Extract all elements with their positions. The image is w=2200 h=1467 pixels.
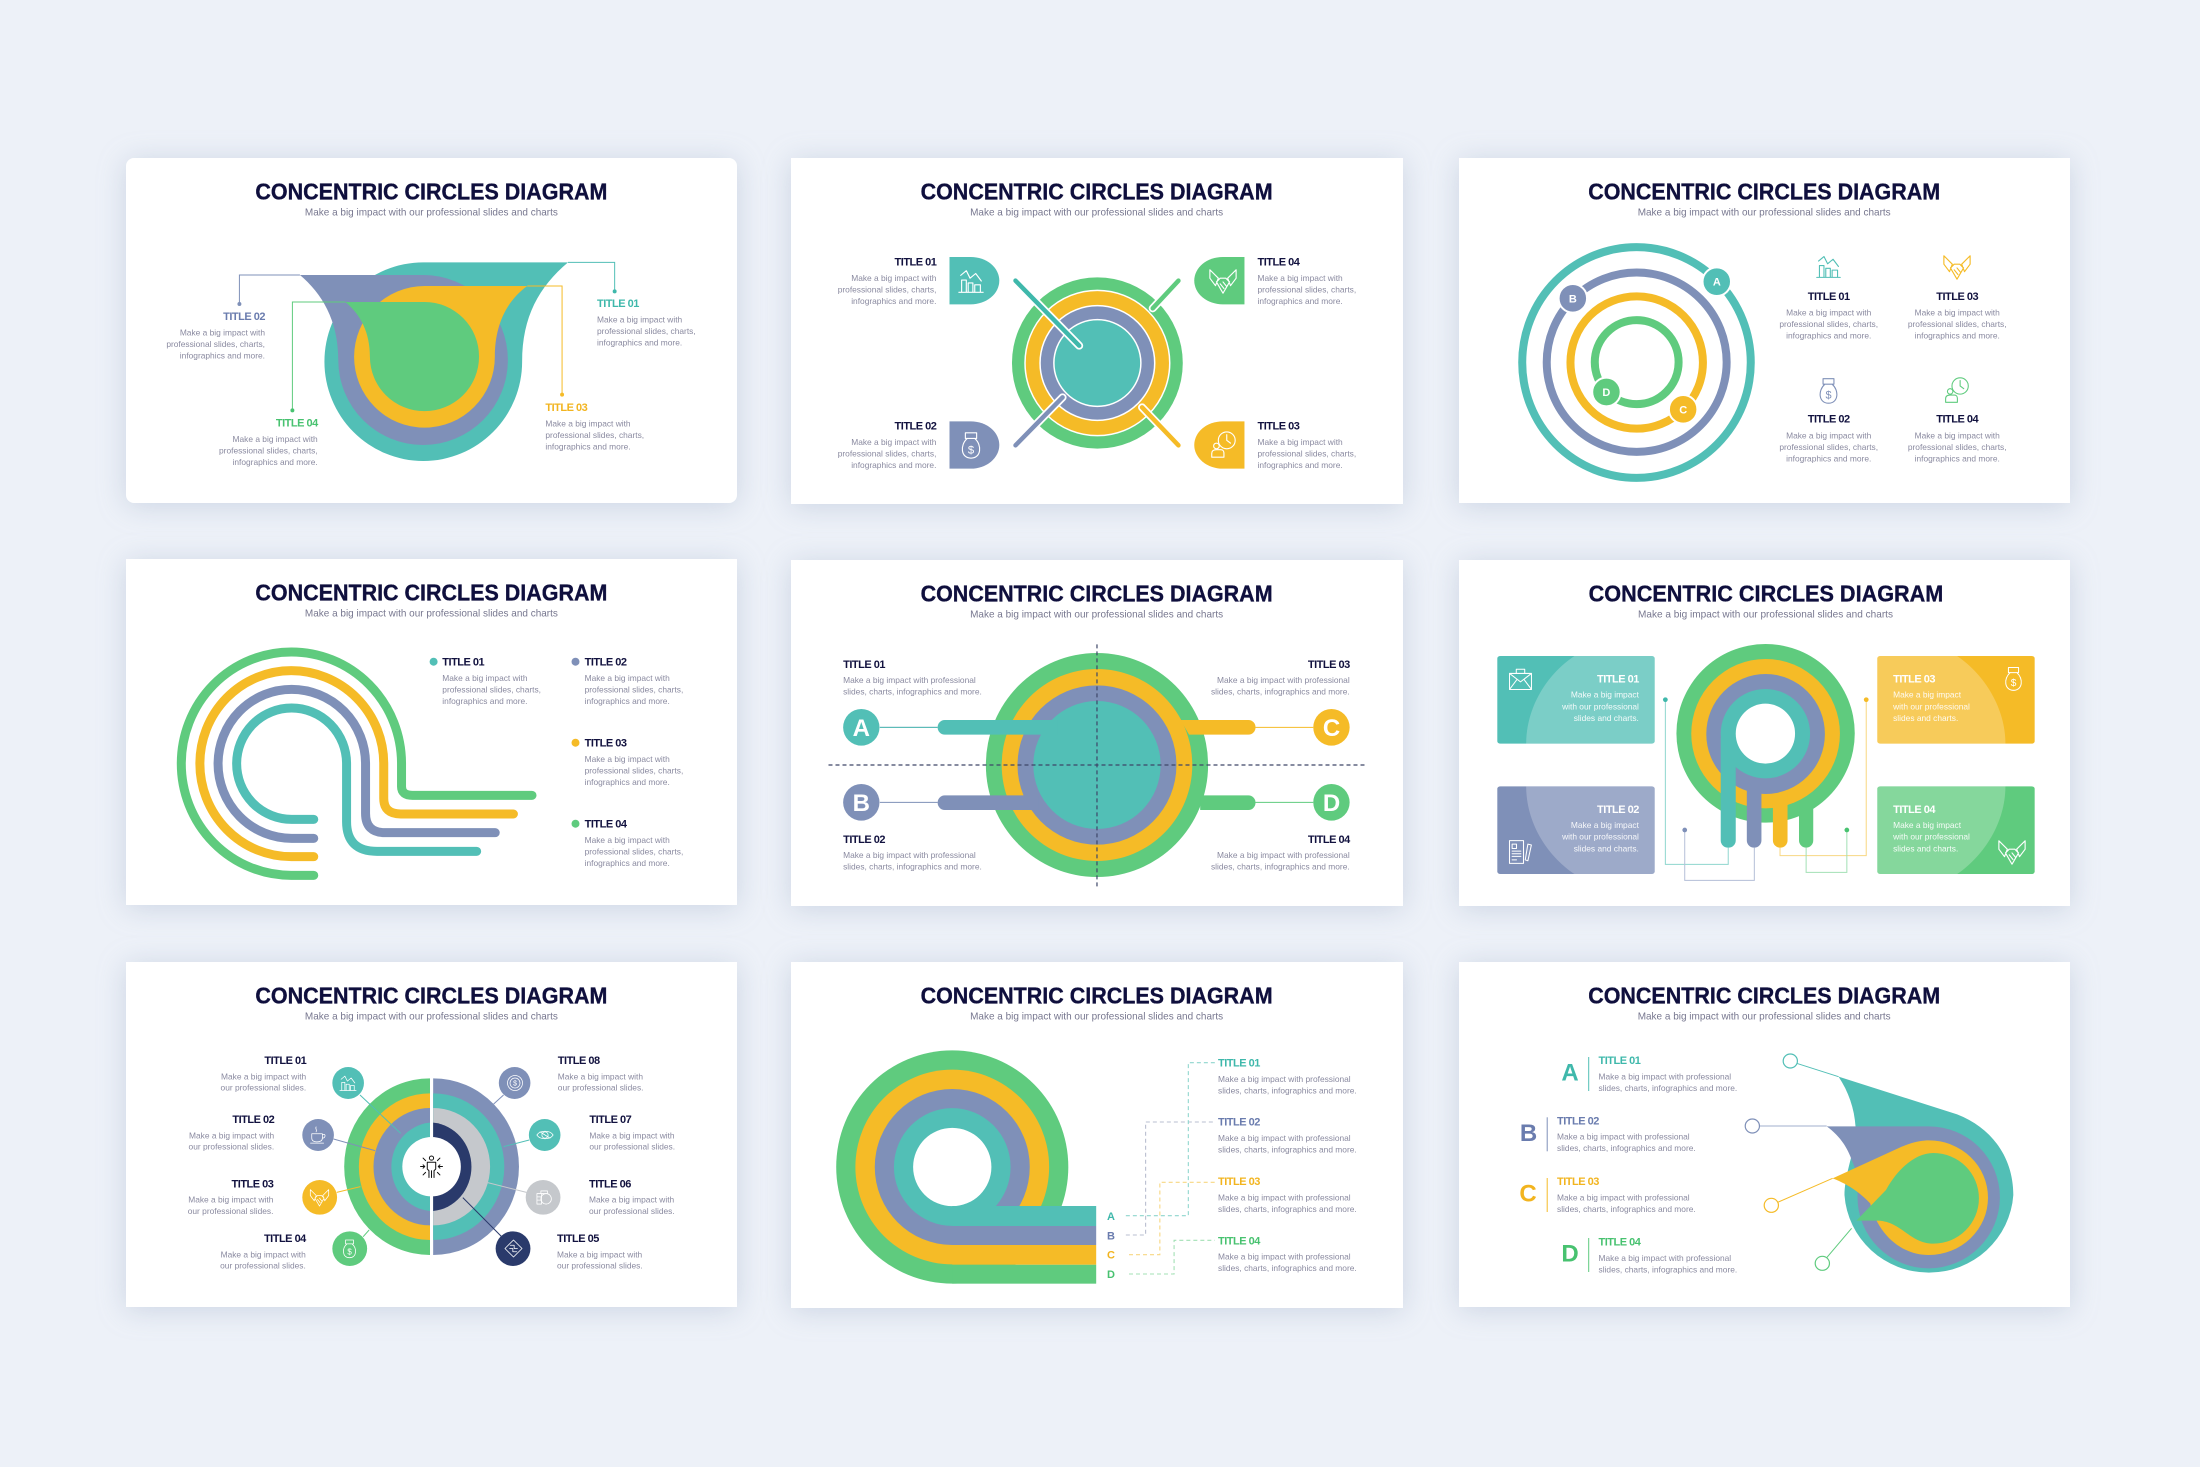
card text: title 03: with our professional	[1892, 701, 1970, 711]
subtitle: Make a big impact with our professional slides and charts	[305, 207, 558, 219]
text: title 03: our professional slides.	[188, 1206, 273, 1216]
legend: title 04: Make a big impact with	[585, 835, 670, 845]
list item C: C	[1519, 1180, 1537, 1207]
text: title 04: infographics and more.	[1258, 296, 1343, 306]
text: title 05: TITLE 05	[557, 1233, 599, 1245]
text: title 01: Make a big impact with	[221, 1071, 307, 1081]
list item D	[1561, 1237, 1737, 1274]
text: title 02: our professional slides.	[189, 1142, 274, 1152]
panel: quadrant circles	[791, 560, 1403, 906]
text: title 07: our professional slides.	[589, 1142, 675, 1152]
text: title 04: slides, charts, infographics and more.	[1218, 1263, 1357, 1273]
legend: title 04: TITLE 04	[585, 819, 628, 831]
panel: looping tracks	[126, 559, 737, 905]
text: title 01: slides, charts, infographics and more.	[1218, 1086, 1357, 1096]
text: title 03	[1258, 421, 1356, 470]
diagram: orbit rings	[1522, 247, 1751, 478]
text: title 02: TITLE 02	[1808, 414, 1850, 426]
text: title 02: professional slides, charts,	[166, 339, 265, 349]
card text: title 03: Make a big impact	[1893, 690, 1962, 700]
card text: title 04	[1892, 804, 1970, 853]
heading: CONCENTRIC CIRCLES DIAGRAM	[1588, 982, 1940, 1008]
text: title 03: Make a big impact with professional	[1217, 675, 1350, 685]
badge letters: C	[1679, 404, 1687, 416]
legend: title 04: infographics and more.	[585, 858, 670, 868]
letter badges: A	[853, 715, 870, 742]
list item B: TITLE 02	[1557, 1115, 1599, 1127]
text: title 03: Make a big impact with	[545, 418, 631, 428]
subtitle: Make a big impact with our professional slides and charts	[970, 207, 1223, 219]
text: title 04	[1211, 834, 1351, 872]
text: title 02: professional slides, charts,	[1779, 442, 1878, 452]
text: title 04: Make a big impact with professional	[1217, 850, 1350, 860]
band letters	[1107, 1211, 1115, 1281]
text: title 04: Make a big impact with	[221, 1249, 306, 1259]
list item B: Make a big impact with professional	[1557, 1132, 1690, 1142]
text: title 03: infographics and more.	[1915, 331, 2000, 341]
icon: center network	[421, 1156, 442, 1177]
badge letters: D	[1602, 387, 1610, 399]
icon: chart	[1817, 257, 1840, 277]
list item D: Make a big impact with professional	[1598, 1253, 1731, 1263]
legend: title 02: Make a big impact with	[585, 673, 670, 683]
list item B	[1520, 1115, 1696, 1153]
text: title 01: TITLE 01	[1218, 1058, 1260, 1070]
text: title 04: professional slides, charts,	[219, 445, 318, 455]
icon: eye	[537, 1131, 553, 1139]
text: title 04	[1258, 256, 1356, 306]
badge letters: B	[1569, 293, 1577, 305]
panel: teardrop concentric shapes	[126, 158, 737, 503]
icon: clock	[1212, 432, 1235, 457]
text: title 03	[1908, 291, 2007, 341]
text: title 04: slides, charts, infographics and more.	[1211, 862, 1350, 872]
text: title 03: Make a big impact with	[1258, 437, 1343, 447]
text: title 02: slides, charts, infographics and more.	[1218, 1145, 1357, 1155]
icon: briefcase	[1510, 669, 1531, 689]
text: title 02: professional slides, charts,	[838, 449, 936, 459]
icon: diamond box	[505, 1240, 522, 1257]
text: title 07: TITLE 07	[589, 1114, 632, 1126]
heading: CONCENTRIC CIRCLES DIAGRAM	[1589, 580, 1943, 606]
letter badges: B	[853, 790, 870, 817]
text: title 03: professional slides, charts,	[1908, 319, 2007, 329]
panel: rings with diagonal sticks	[791, 158, 1403, 504]
text: title 03: slides, charts, infographics and more.	[1211, 687, 1350, 697]
text: title 02	[1779, 414, 1878, 463]
text: title 01	[221, 1055, 307, 1093]
diagram: funnel drops	[237, 262, 617, 461]
text: title 03: TITLE 03	[1258, 421, 1300, 433]
text: title 02: Make a big impact with	[180, 328, 265, 338]
heading: CONCENTRIC CIRCLES DIAGRAM	[255, 982, 607, 1008]
text: title 04: TITLE 04	[1218, 1235, 1261, 1247]
heading: CONCENTRIC CIRCLES DIAGRAM	[921, 580, 1273, 606]
text: title 03	[545, 402, 644, 452]
card text: title 02: Make a big impact	[1571, 820, 1640, 830]
card text: title 04: with our professional	[1892, 832, 1970, 842]
list item C: slides, charts, infographics and more.	[1557, 1204, 1696, 1214]
text: title 04: infographics and more.	[1915, 453, 2000, 463]
text: title 02: infographics and more.	[1786, 453, 1871, 463]
text: title 04: TITLE 04	[1258, 256, 1301, 268]
subtitle: Make a big impact with our professional slides and charts	[305, 1010, 558, 1022]
panel: swirling drops	[1459, 962, 2070, 1307]
legend: title 01: Make a big impact with	[442, 673, 528, 683]
text: title 06: Make a big impact with	[589, 1195, 675, 1205]
legend: title 03	[572, 738, 683, 787]
icon: coins	[537, 1191, 551, 1204]
diagram: split rings and connectors	[302, 1067, 560, 1266]
text: title 04	[1908, 414, 2007, 463]
text: title 03: TITLE 03	[1308, 659, 1350, 671]
heading: CONCENTRIC CIRCLES DIAGRAM	[921, 982, 1273, 1008]
text: title 06: our professional slides.	[589, 1206, 675, 1216]
icon: money bag	[343, 1240, 356, 1258]
subtitle: Make a big impact with our professional slides and charts	[1638, 207, 1891, 219]
subtitle: Make a big impact with our professional slides and charts	[1638, 1010, 1891, 1022]
list item D: slides, charts, infographics and more.	[1598, 1264, 1737, 1274]
subtitle: Make a big impact with our professional slides and charts	[970, 1010, 1223, 1022]
text: title 01: Make a big impact with	[597, 314, 683, 324]
heading: CONCENTRIC CIRCLES DIAGRAM	[921, 178, 1273, 204]
text: title 04: TITLE 04	[1308, 834, 1351, 846]
text: title 02: slides, charts, infographics and more.	[843, 862, 982, 872]
text: title 02	[1218, 1117, 1357, 1155]
subtitle: Make a big impact with our professional slides and charts	[970, 609, 1223, 621]
legend: title 02	[572, 657, 683, 706]
text: title 03: Make a big impact with	[188, 1195, 274, 1205]
text: title 02: TITLE 02	[232, 1114, 275, 1126]
text: title 03: slides, charts, infographics and more.	[1218, 1204, 1357, 1214]
text: title 04: TITLE 04	[1936, 414, 1980, 426]
text: title 03: TITLE 03	[1218, 1176, 1260, 1188]
text: title 01: professional slides, charts,	[1779, 319, 1878, 329]
text: title 07: Make a big impact with	[589, 1130, 675, 1140]
text: title 04: TITLE 04	[264, 1233, 307, 1245]
text: title 01	[597, 298, 696, 348]
text: title 02: infographics and more.	[851, 460, 936, 470]
panel: outlined orbits	[1459, 158, 2070, 503]
card text: title 02	[1561, 804, 1640, 853]
text: title 07	[589, 1114, 675, 1152]
legend: title 04	[572, 819, 683, 868]
band letters: D	[1107, 1269, 1115, 1281]
text: title 06: TITLE 06	[589, 1178, 631, 1190]
subtitle: Make a big impact with our professional slides and charts	[1638, 609, 1893, 621]
text: title 02: TITLE 02	[1218, 1117, 1260, 1129]
legend: title 01: infographics and more.	[442, 696, 528, 706]
text: title 01: our professional slides.	[221, 1083, 306, 1093]
diagram: four tracks	[181, 652, 532, 875]
icon: clock	[1946, 378, 1968, 402]
diagram: rolled bands and dashed connectors	[836, 1050, 1215, 1284]
text: title 03: TITLE 03	[232, 1178, 274, 1190]
text: title 05	[557, 1233, 643, 1271]
heading: CONCENTRIC CIRCLES DIAGRAM	[255, 178, 607, 204]
card text: title 01: TITLE 01	[1597, 674, 1639, 686]
text: title 02: TITLE 02	[895, 421, 937, 433]
legend: title 02: infographics and more.	[585, 696, 670, 706]
text: title 01: infographics and more.	[1786, 331, 1871, 341]
icon: handshake	[1999, 841, 2025, 864]
text: title 01: professional slides, charts,	[838, 284, 936, 294]
list item A: TITLE 01	[1598, 1055, 1641, 1067]
text: title 06	[589, 1178, 675, 1216]
text: title 01	[843, 659, 982, 697]
card text: title 02: slides and charts.	[1574, 843, 1639, 853]
icon: handshake	[310, 1190, 329, 1206]
list item A: A	[1561, 1060, 1579, 1087]
text: title 01: Make a big impact with	[1786, 308, 1872, 318]
text: title 02: TITLE 02	[843, 834, 885, 846]
card text: title 02: with our professional	[1561, 832, 1639, 842]
list item B: B	[1520, 1120, 1537, 1147]
list item A: slides, charts, infographics and more.	[1598, 1083, 1737, 1093]
text: title 01: infographics and more.	[597, 338, 682, 348]
subtitle: Make a big impact with our professional slides and charts	[305, 608, 558, 620]
text: title 04: our professional slides.	[220, 1261, 306, 1271]
text: title 02	[843, 834, 982, 872]
icon: money bag	[1820, 379, 1837, 403]
card text: title 03: slides and charts.	[1893, 713, 1958, 723]
legend: title 03: professional slides, charts,	[585, 766, 683, 776]
card text: title 01: with our professional	[1561, 701, 1639, 711]
text: title 02	[166, 311, 265, 360]
list item C: TITLE 03	[1557, 1176, 1599, 1188]
text: title 05: our professional slides.	[557, 1261, 643, 1271]
text: title 01: Make a big impact with professional	[1218, 1074, 1351, 1084]
text: title 03	[1218, 1176, 1357, 1214]
diagram: concentric rings and tabs	[949, 257, 1244, 469]
text: title 01: slides, charts, infographics and more.	[843, 687, 982, 697]
band letters: A	[1107, 1211, 1115, 1223]
text: title 01	[838, 256, 937, 306]
panel: eight-part split circle	[126, 962, 737, 1307]
diagram: swirling drops with pins	[1745, 1054, 2013, 1273]
letter badges: C	[1323, 715, 1340, 742]
text: title 08: our professional slides.	[558, 1083, 643, 1093]
text: title 03: infographics and more.	[545, 442, 631, 452]
icon: document	[1510, 841, 1531, 863]
text: title 03	[1211, 659, 1350, 697]
icon: money bag	[962, 433, 980, 458]
legend: title 03: infographics and more.	[585, 777, 670, 787]
icon: money bag	[2006, 668, 2021, 690]
text: title 03: TITLE 03	[1936, 291, 1979, 303]
text: title 04: professional slides, charts,	[1258, 284, 1356, 294]
text: title 01	[1779, 291, 1878, 341]
text: title 02: infographics and more.	[180, 350, 265, 360]
text: title 01	[1218, 1058, 1357, 1096]
list item C: Make a big impact with professional	[1557, 1192, 1690, 1202]
card text: title 01: slides and charts.	[1574, 713, 1639, 723]
text: title 04: Make a big impact with	[1915, 430, 2000, 440]
text: title 01: TITLE 01	[843, 659, 885, 671]
panel: dripping rings with cards	[1459, 560, 2070, 906]
text: title 01: professional slides, charts,	[597, 326, 696, 336]
text: title 01: TITLE 01	[264, 1055, 307, 1067]
legend: title 03: TITLE 03	[585, 738, 627, 750]
band letters: C	[1107, 1250, 1115, 1262]
list item C	[1519, 1176, 1696, 1214]
text: title 02: Make a big impact with professional	[1218, 1133, 1351, 1143]
text: title 03	[188, 1178, 274, 1216]
text: title 02: Make a big impact with	[851, 437, 937, 447]
icon: coin	[508, 1076, 522, 1090]
card text: title 01	[1561, 674, 1640, 723]
diagram: rings, drips, cards, connectors	[1497, 644, 2035, 880]
list item B: slides, charts, infographics and more.	[1557, 1143, 1696, 1153]
legend: title 01: professional slides, charts,	[442, 685, 541, 695]
icon: cup	[310, 1127, 325, 1143]
legend: title 02: professional slides, charts,	[585, 685, 683, 695]
text: title 03: Make a big impact with professional	[1218, 1192, 1351, 1202]
text: title 03: TITLE 03	[545, 402, 588, 414]
legend: title 03: Make a big impact with	[585, 754, 670, 764]
text: title 04	[220, 1233, 307, 1271]
text: title 02	[838, 421, 937, 470]
list item D: TITLE 04	[1598, 1237, 1642, 1249]
text: title 02: Make a big impact with	[189, 1130, 275, 1140]
letter badges	[853, 715, 1340, 817]
text: title 04: Make a big impact with professional	[1218, 1252, 1351, 1262]
legend: title 01	[430, 657, 541, 706]
heading: CONCENTRIC CIRCLES DIAGRAM	[1588, 178, 1940, 204]
text: title 01: TITLE 01	[597, 298, 639, 310]
text: title 02: Make a big impact with	[1786, 430, 1872, 440]
legend: title 02: TITLE 02	[585, 657, 627, 669]
card text: title 03: TITLE 03	[1893, 674, 1935, 686]
card text: title 03	[1892, 674, 1970, 723]
text: title 04	[219, 417, 319, 467]
list item A	[1561, 1055, 1737, 1093]
text: title 01: Make a big impact with professional	[843, 675, 976, 685]
text: title 03: Make a big impact with	[1915, 308, 2000, 318]
icon: chart	[959, 271, 983, 292]
card text: title 02: TITLE 02	[1597, 804, 1639, 816]
text: title 04: infographics and more.	[232, 457, 318, 467]
icon: chart	[340, 1076, 356, 1090]
text: title 03: infographics and more.	[1258, 460, 1343, 470]
text: title 08	[558, 1055, 643, 1093]
band letters: B	[1107, 1230, 1115, 1242]
text: title 02: TITLE 02	[223, 311, 265, 323]
text: title 01: TITLE 01	[1808, 291, 1850, 303]
diagram: circles, bars and crosshair	[828, 644, 1365, 888]
icon: handshake	[1210, 270, 1236, 293]
list item A: Make a big impact with professional	[1598, 1071, 1731, 1081]
list item D: D	[1561, 1240, 1579, 1267]
heading: CONCENTRIC CIRCLES DIAGRAM	[255, 579, 607, 605]
text: title 02	[189, 1114, 275, 1152]
letter badges: D	[1323, 790, 1340, 817]
legend: title 04: professional slides, charts,	[585, 847, 683, 857]
badge letters	[1569, 277, 1721, 416]
icon: handshake	[1944, 256, 1970, 279]
text: title 01: infographics and more.	[851, 296, 936, 306]
panel: rolled bands	[791, 962, 1403, 1308]
text: title 04: Make a big impact with	[1258, 273, 1343, 283]
text: title 02: Make a big impact with professional	[843, 850, 976, 860]
card text: title 04: TITLE 04	[1893, 804, 1936, 816]
text: title 01: TITLE 01	[895, 256, 937, 268]
text: title 08: TITLE 08	[558, 1055, 600, 1067]
text: title 04: Make a big impact with	[233, 434, 318, 444]
text: title 03: professional slides, charts,	[545, 430, 644, 440]
text: title 05: Make a big impact with	[557, 1249, 643, 1259]
card text: title 01: Make a big impact	[1571, 690, 1640, 700]
text: title 04: professional slides, charts,	[1908, 442, 2007, 452]
text: title 04: TITLE 04	[276, 417, 319, 429]
card text: title 04: Make a big impact	[1893, 820, 1962, 830]
badge letters: A	[1713, 277, 1721, 289]
text: title 04	[1218, 1235, 1357, 1273]
card text: title 04: slides and charts.	[1893, 843, 1958, 853]
text: title 08: Make a big impact with	[558, 1071, 643, 1081]
text: title 01: Make a big impact with	[851, 273, 937, 283]
legend: title 01: TITLE 01	[442, 657, 485, 669]
text: title 03: professional slides, charts,	[1258, 449, 1356, 459]
